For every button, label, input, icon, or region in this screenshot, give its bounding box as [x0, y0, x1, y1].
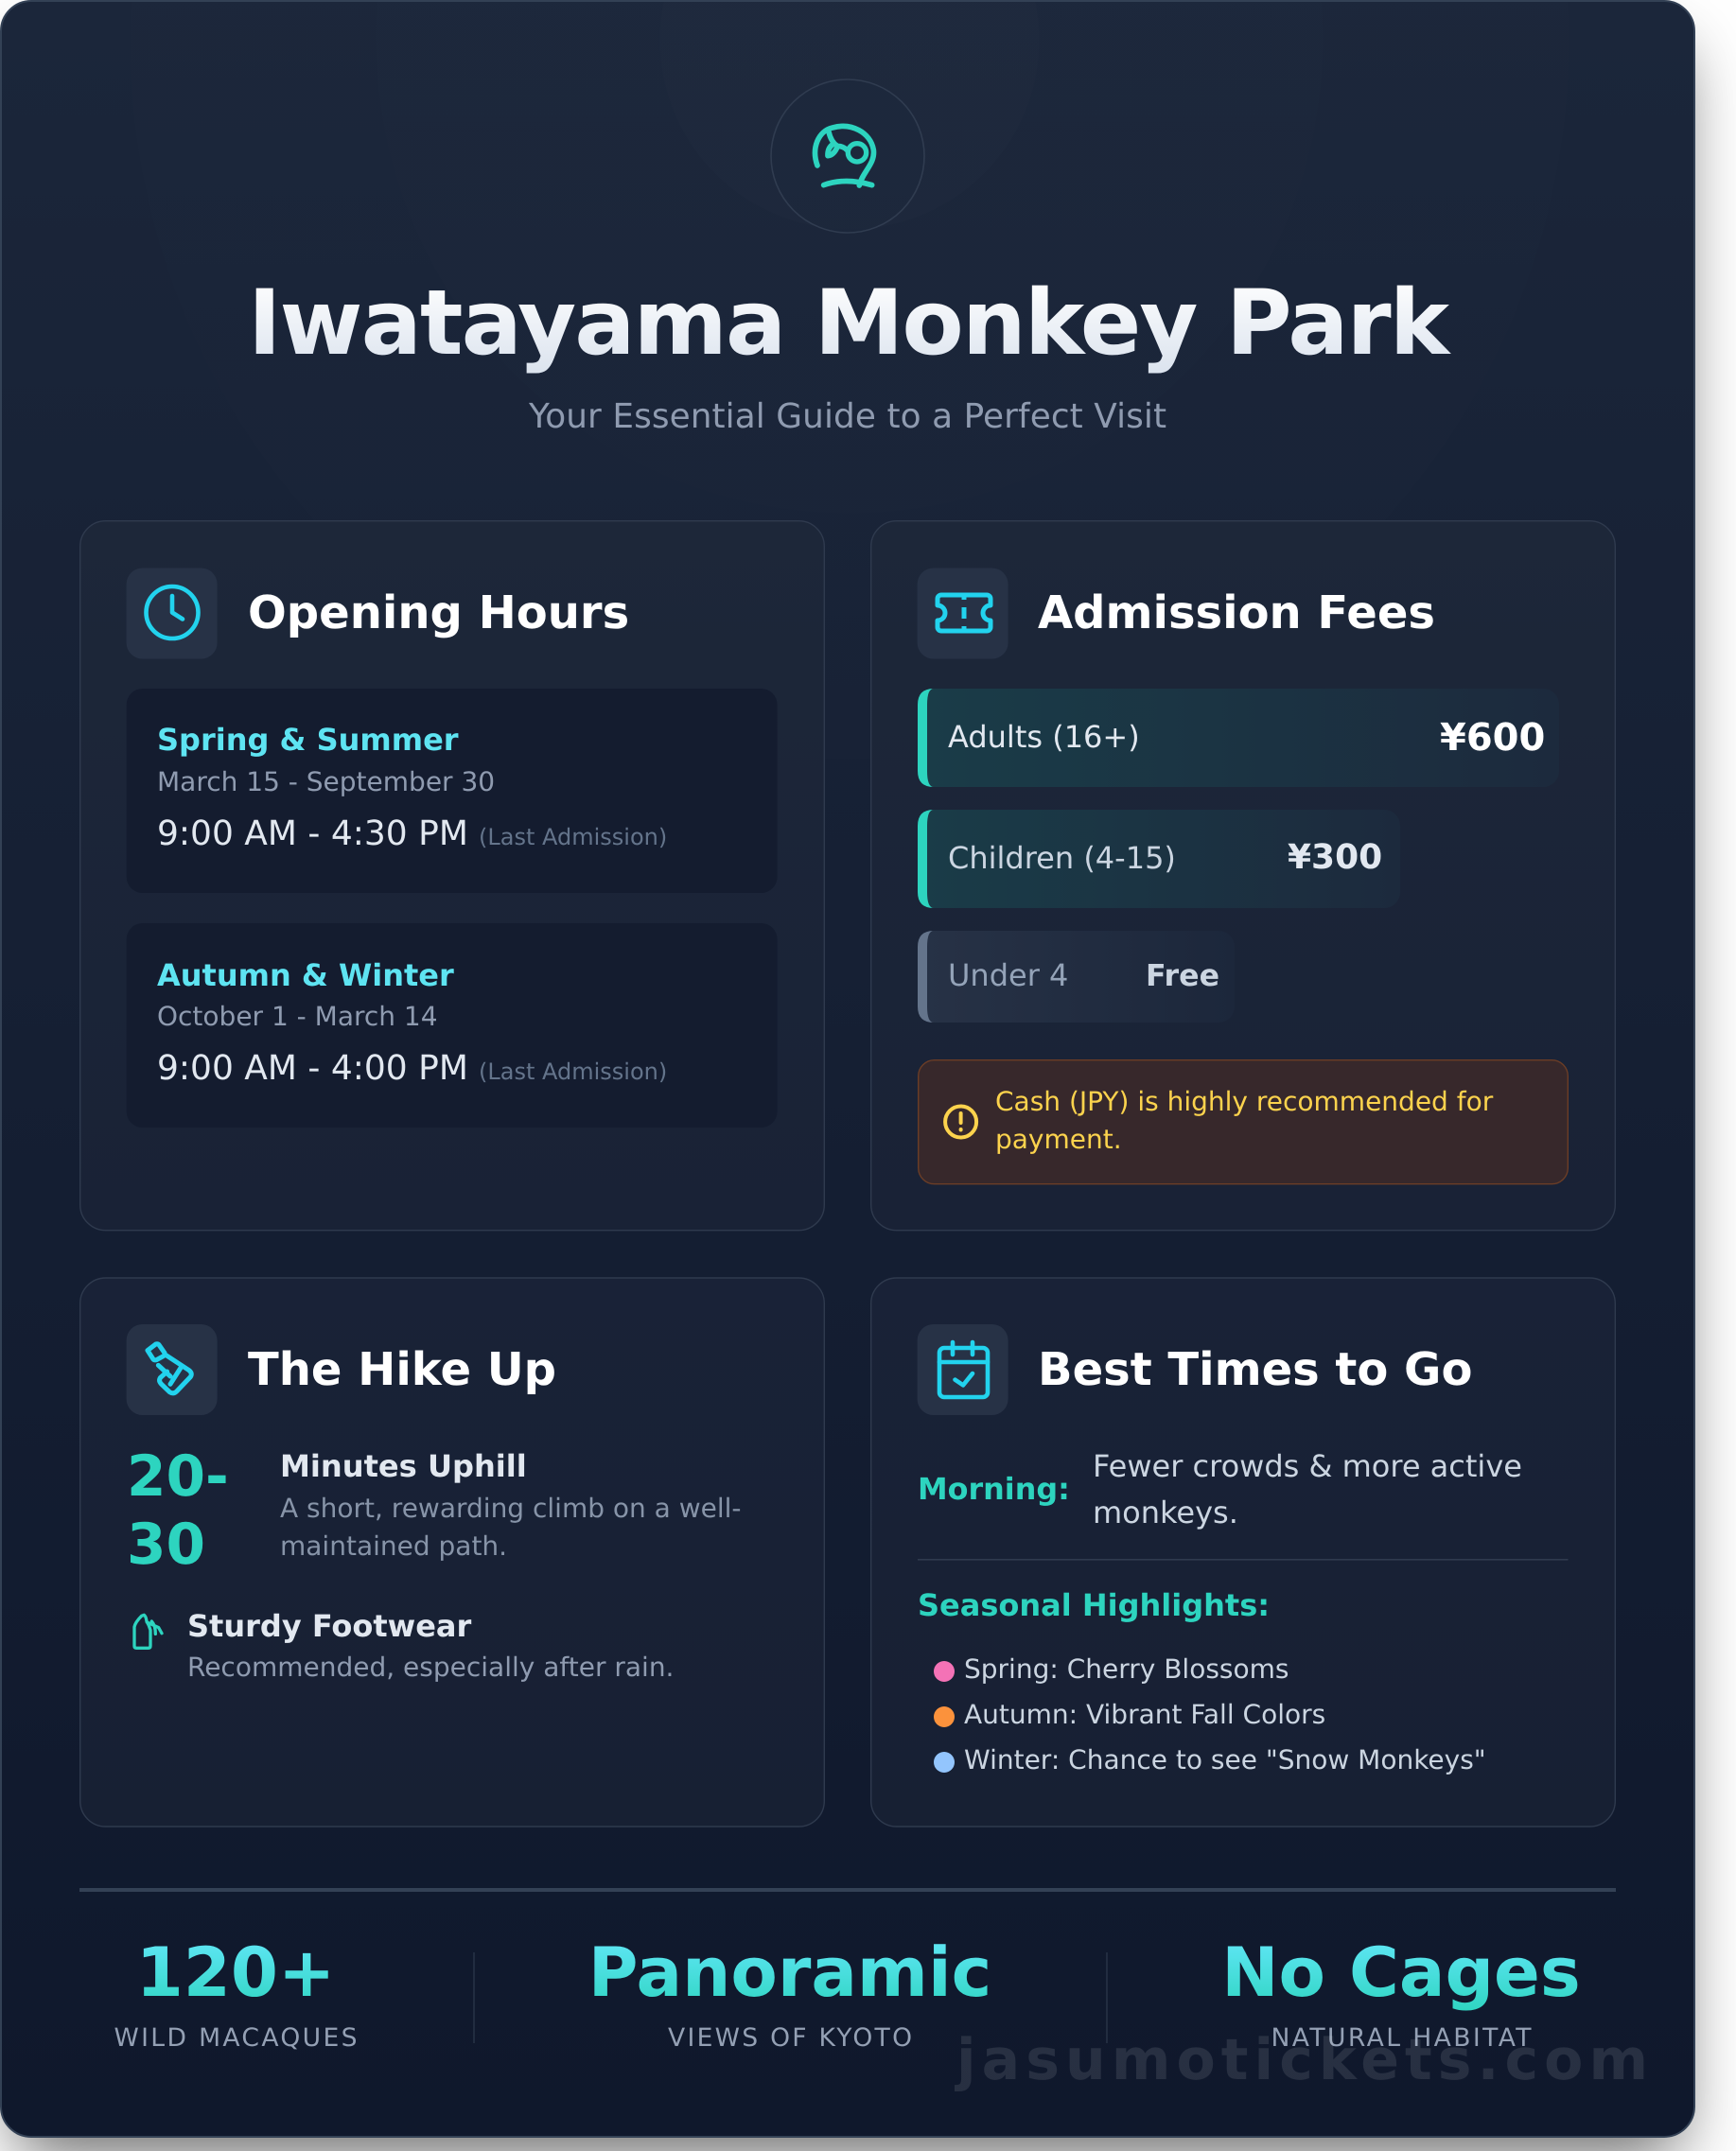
- text: minutes uphill: [280, 1448, 742, 1562]
- header: [248, 79, 1452, 436]
- stat: panoramic: Panoramic: [588, 1932, 991, 2012]
- stat: panoramic: VIEWS OF KYOTO: [668, 2023, 912, 2053]
- fee row: children: ¥300: [1288, 838, 1382, 877]
- text: morning: [918, 1448, 1522, 1530]
- icon: clock: [127, 568, 218, 658]
- heading: opening hours: Opening Hours: [248, 586, 629, 639]
- stat: minutes: [127, 1444, 229, 1578]
- text: minutes uphill: maintained path.: [280, 1530, 507, 1562]
- callout: cash recommended: Cash (JPY) is highly recommended for: [995, 1086, 1494, 1117]
- fee row: children: Children (4-15): [948, 840, 1176, 876]
- stat: minutes: 30: [127, 1513, 205, 1578]
- winter item: Winter: Chance to see "Snow Monkeys": [964, 1744, 1486, 1775]
- fee row: adults: ¥600: [1440, 716, 1545, 760]
- icon: hike: [127, 1324, 218, 1415]
- stat: no cages: [1221, 1932, 1581, 2053]
- stat: wild macaques: 120+: [136, 1932, 335, 2012]
- block: spring and summer: 9:00 AM - 4:30 PM: [157, 814, 468, 853]
- spring item: Spring: Cherry Blossoms: [964, 1653, 1289, 1685]
- text: minutes uphill: Minutes Uphill: [280, 1448, 527, 1484]
- block: spring and summer: March 15 - September 30: [157, 766, 495, 797]
- block: spring and summer: (Last Admission): [479, 824, 667, 850]
- panel: best times to go: [871, 1278, 1615, 1827]
- callout: cash recommended: [919, 1060, 1568, 1184]
- stat: wild macaques: [114, 1932, 358, 2053]
- stat: no cages: No Cages: [1221, 1932, 1581, 2012]
- block: autumn and winter: October 1 - March 14: [157, 1001, 438, 1032]
- text: seasonal highlights: [918, 1587, 1486, 1775]
- text: minutes uphill: A short, rewarding climb on a well-: [280, 1493, 742, 1524]
- fee row: under 4: [918, 931, 1235, 1023]
- autumn item: Autumn: Vibrant Fall Colors: [964, 1699, 1325, 1730]
- fee row: adults: Adults (16+): [948, 719, 1140, 755]
- block: autumn and winter: 9:00 AM - 4:00 PM: [157, 1049, 468, 1088]
- icon: monkey logo: [771, 79, 924, 233]
- icon: ticket: [918, 568, 1008, 658]
- text: sturdy footwear: Recommended, especially after rain.: [187, 1652, 674, 1683]
- text: sturdy footwear: [187, 1608, 674, 1683]
- fee row: under 4: Free: [1146, 959, 1219, 993]
- panel: admission fees: [871, 521, 1615, 1231]
- block: spring and summer: Spring & Summer: [157, 722, 459, 758]
- panel: opening hours: [80, 521, 824, 1231]
- block: spring and summer: [127, 689, 778, 893]
- callout: cash recommended: payment.: [995, 1124, 1122, 1155]
- stat: no cages: NATURAL HABITAT: [1271, 2023, 1532, 2053]
- subtitle: Your Essential Guide to a Perfect Visit: [528, 397, 1166, 436]
- stat: wild macaques: WILD MACAQUES: [114, 2023, 358, 2053]
- heading: admission fees: Admission Fees: [1038, 586, 1435, 639]
- heading: the hike up: The Hike Up: [248, 1343, 556, 1396]
- text: morning: Morning:: [918, 1472, 1070, 1507]
- block: autumn and winter: (Last Admission): [479, 1058, 667, 1085]
- stat: panoramic: [588, 1932, 991, 2053]
- text: morning: Fewer crowds & more active: [1093, 1448, 1522, 1484]
- watermark: jasumotickets.com: [955, 2027, 1648, 2093]
- heading: best times to go: Best Times to Go: [1038, 1343, 1472, 1396]
- icon: footwear: [134, 1615, 162, 1648]
- fee row: children: [918, 810, 1400, 908]
- icon: calendar: [918, 1324, 1008, 1415]
- text: morning: monkeys.: [1093, 1495, 1238, 1530]
- text: sturdy footwear: Sturdy Footwear: [187, 1608, 471, 1644]
- stat: minutes: 20-: [127, 1444, 229, 1510]
- block: autumn and winter: Autumn & Winter: [157, 957, 454, 993]
- block: autumn and winter: [127, 923, 778, 1128]
- panel: the hike up: [80, 1278, 824, 1827]
- fee row: adults: [918, 689, 1559, 787]
- fee row: under 4: Under 4: [948, 957, 1068, 993]
- text: seasonal highlights: Seasonal Highlights:: [918, 1587, 1270, 1623]
- title: Iwatayama Monkey Park: [248, 271, 1452, 376]
